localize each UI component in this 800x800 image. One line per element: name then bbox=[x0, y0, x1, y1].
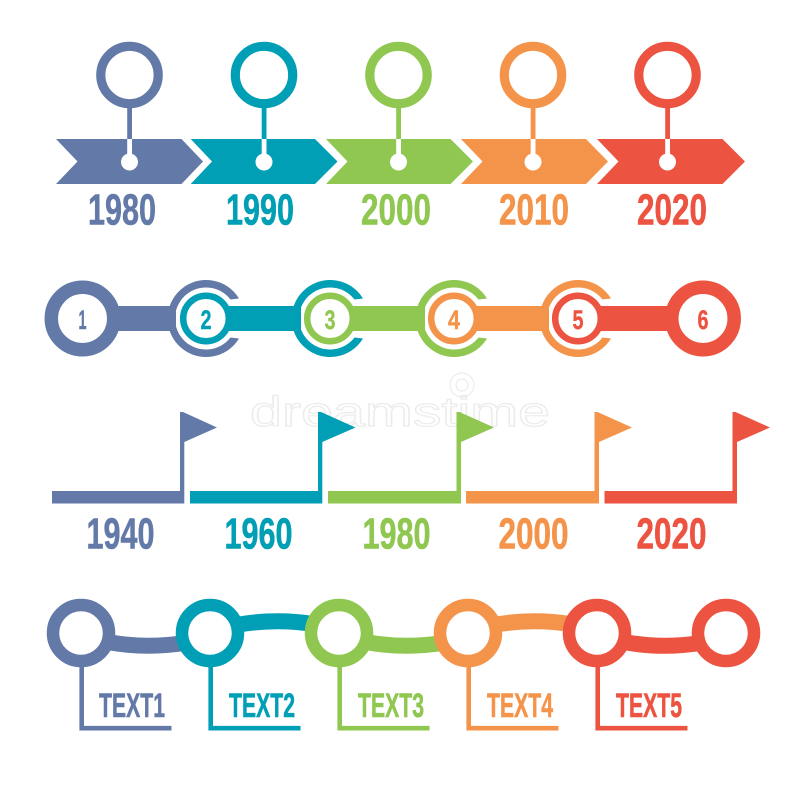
flag 2020: 2020 bbox=[636, 510, 706, 558]
step 6 bbox=[672, 287, 734, 350]
step 4 bbox=[416, 280, 549, 357]
arrow 2010: 2010 bbox=[499, 186, 569, 234]
step 6: 6 bbox=[698, 305, 708, 335]
arrow 2020: 2020 bbox=[637, 186, 707, 234]
step 2: 2 bbox=[200, 305, 212, 335]
flag 1940: 1940 bbox=[86, 510, 154, 558]
flag 2000 bbox=[466, 412, 632, 558]
arrow 1980: 1980 bbox=[88, 186, 156, 234]
node text4: TEXT4 bbox=[487, 687, 553, 725]
end node bbox=[698, 605, 754, 661]
timeline 1: arrows with pins bbox=[56, 46, 745, 234]
watermark: dreamstime bbox=[250, 388, 550, 435]
arrow 2010 bbox=[461, 46, 608, 234]
step 4: 4 bbox=[448, 305, 460, 335]
step 5 bbox=[540, 280, 682, 357]
arrow 2000 bbox=[326, 46, 473, 234]
flag 1940 bbox=[52, 412, 217, 558]
timeline 2: numbered rings bbox=[51, 280, 734, 357]
flag 2000: 2000 bbox=[498, 510, 568, 558]
node text1: TEXT1 bbox=[99, 687, 165, 725]
step 1: 1 bbox=[78, 305, 86, 335]
step 1 bbox=[51, 287, 176, 350]
node text2 bbox=[182, 605, 313, 728]
node text3 bbox=[311, 605, 442, 728]
timeline 3: flags bbox=[52, 412, 770, 558]
node text5: TEXT5 bbox=[616, 687, 682, 725]
flag 1960 bbox=[190, 412, 356, 558]
node text3: TEXT3 bbox=[358, 687, 424, 725]
step 3: 3 bbox=[324, 305, 336, 335]
step 5: 5 bbox=[572, 305, 584, 335]
node text4 bbox=[440, 605, 570, 728]
arrow 2020 bbox=[597, 46, 745, 234]
timeline 4: wavy line with text labels bbox=[53, 605, 754, 728]
node text1 bbox=[53, 605, 184, 728]
node text2: TEXT2 bbox=[229, 687, 295, 725]
arrow 1990: 1990 bbox=[226, 186, 294, 234]
flag 1960: 1960 bbox=[224, 510, 292, 558]
node text5 bbox=[569, 605, 700, 728]
step 3 bbox=[292, 280, 425, 357]
flag 1980 bbox=[328, 412, 494, 558]
watermark bbox=[250, 373, 550, 435]
flag 2020 bbox=[604, 412, 770, 558]
arrow 1980 bbox=[56, 46, 203, 234]
arrow 1990 bbox=[191, 46, 338, 234]
arrow 2000: 2000 bbox=[361, 186, 431, 234]
step 2 bbox=[168, 280, 301, 357]
flag 1980: 1980 bbox=[362, 510, 430, 558]
